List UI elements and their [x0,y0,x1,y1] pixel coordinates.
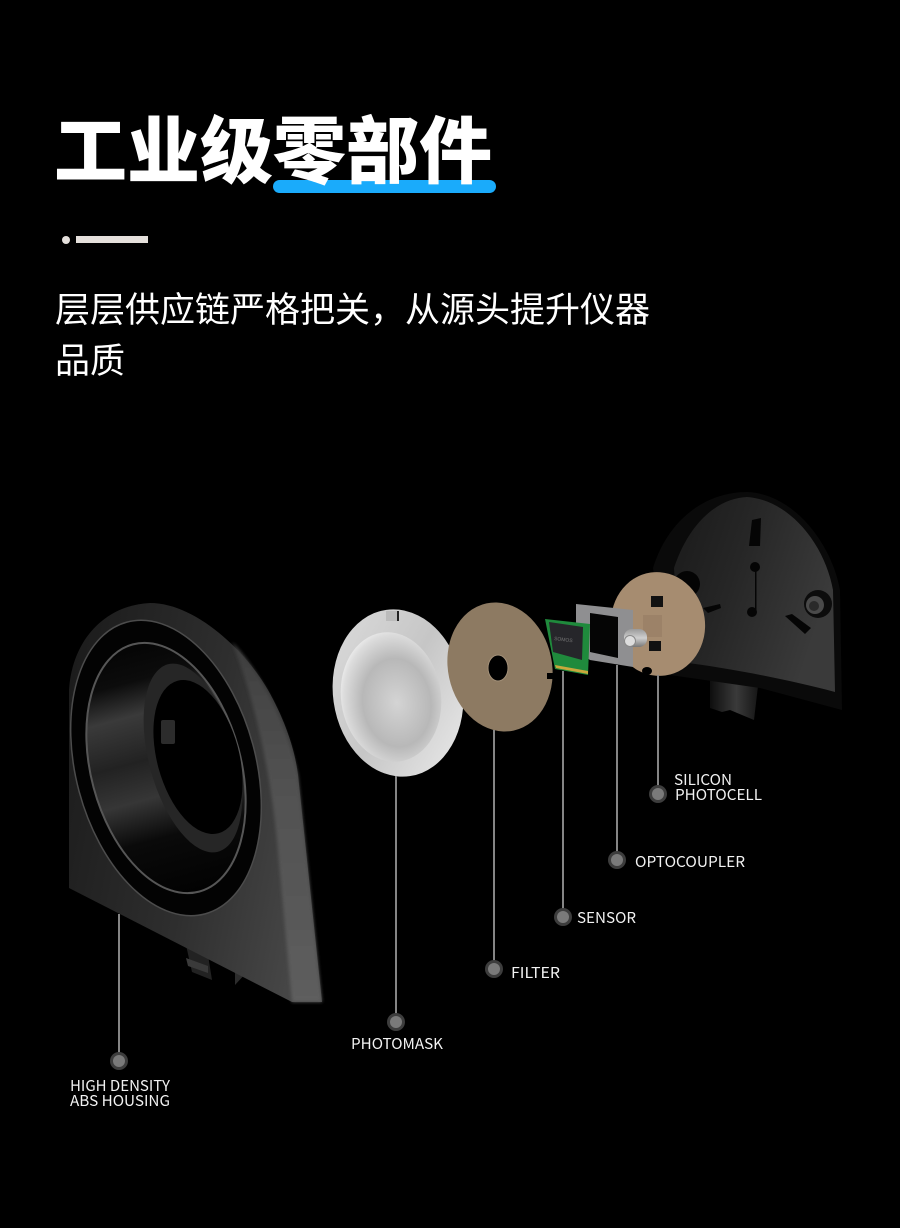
concave inner cone [60,625,272,911]
part: sensor chip [545,619,590,675]
leader: sensor [554,671,636,928]
leader: high density ABS housing [70,914,170,1111]
part: filter disc [436,593,564,741]
dark aperture [138,670,258,844]
label: high density ABS housing: HIGH DENSITY [70,1075,170,1096]
label: silicon photocell: SILICON [674,769,732,790]
rear round post [674,571,700,597]
label: photomask: PHOTOMASK [351,1033,443,1054]
part: photomask lens [322,601,474,785]
label: sensor: SENSOR [577,907,636,928]
part: sensor chip: SOMOS [554,636,574,644]
label: optocoupler: OPTOCOUPLER [635,851,745,872]
optocoupler screw [624,629,647,647]
part: silicon photocell disc [604,566,712,682]
rear screw post [804,590,832,618]
subtitle text [55,291,650,381]
outer ring [40,599,292,937]
part: high density ABS housing [40,586,345,1002]
leader: silicon photocell [649,675,762,805]
rear slot marks [703,518,811,634]
title: 工业级零部件 [54,112,492,193]
label: high density ABS housing: ABS HOUSING [70,1090,170,1111]
subtitle text: 品质 [55,342,125,381]
rear housing connector [710,676,758,720]
label: high density ABS housing [70,1075,170,1111]
title underline highlight [273,180,496,193]
decorative divider dot and bar [62,236,148,244]
inner lens seat [125,653,261,863]
label: silicon photocell: PHOTOCELL [675,784,762,805]
housing bright side rim [232,642,322,1002]
housing rear connector [186,945,246,985]
label: silicon photocell [674,769,762,805]
part: rear housing [653,492,842,720]
lens dome [332,626,450,768]
leader: optocoupler [608,665,745,872]
filter center hole [488,655,508,681]
label: filter: FILTER [511,962,561,983]
leader: photomask [351,776,443,1054]
leader: filter [485,730,561,983]
panel: exploded product view [40,492,842,1002]
subtitle text: 层层供应链严格把关，从源头提升仪器 [55,291,650,330]
small peg in aperture [161,720,175,744]
part: optocoupler bracket [576,604,647,667]
